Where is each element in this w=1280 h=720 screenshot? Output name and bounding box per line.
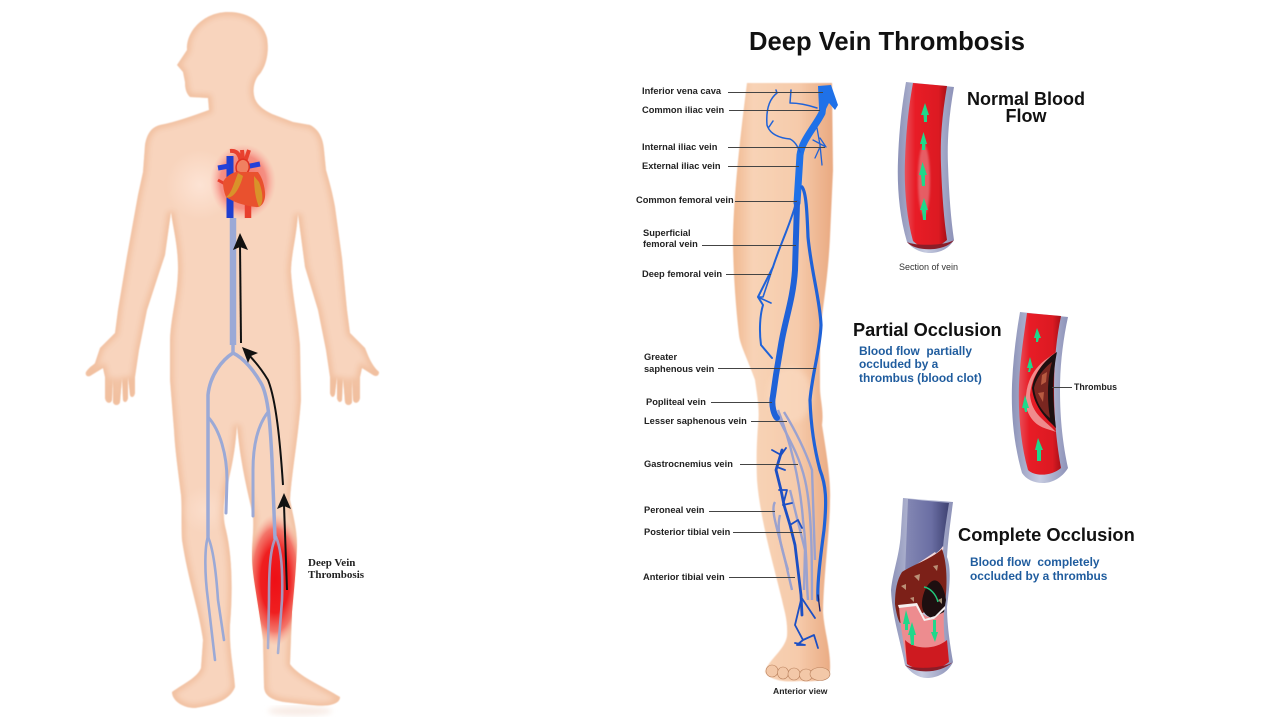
vein labels: Posterior tibial vein — [644, 527, 731, 537]
icon: heart — [210, 144, 276, 220]
panel: complete occlusion — [891, 498, 1135, 678]
vein labels: Common iliac vein — [642, 105, 724, 115]
thrombus callout — [1052, 382, 1117, 392]
vein labels: Peroneal vein — [644, 505, 705, 515]
vein labels: Superficial — [643, 228, 691, 238]
leg and torso veins — [205, 218, 282, 660]
toes — [766, 665, 830, 681]
label: Deep Vein Thrombosis — [308, 557, 365, 581]
panel: partial occlusion — [853, 312, 1117, 483]
thrombus callout: Thrombus — [1074, 382, 1117, 392]
description: occluded by a thrombus — [970, 569, 1108, 583]
vein section — [898, 82, 954, 253]
leader lines — [702, 92, 825, 578]
vein labels: Internal iliac vein — [642, 142, 718, 152]
heading line two: Flow — [1006, 106, 1047, 126]
vein labels: Common femoral vein — [636, 195, 734, 205]
vena cava arrow — [818, 85, 838, 115]
vein labels: Gastrocnemius vein — [644, 459, 733, 469]
panel: leg anatomy — [636, 83, 838, 696]
panel: normal blood flow vein — [898, 82, 1085, 272]
vein labels: Lesser saphenous vein — [644, 416, 747, 426]
panel: body diagram — [86, 12, 379, 716]
heading: Complete Occlusion — [958, 524, 1135, 545]
description: occluded by a — [859, 357, 939, 371]
title: Deep Vein Thrombosis — [749, 28, 1025, 56]
leg silhouette — [733, 83, 833, 681]
vein labels: Anterior view — [773, 686, 828, 696]
description: Blood flow partially — [859, 344, 972, 358]
vein labels: External iliac vein — [642, 161, 721, 171]
flow arrows — [919, 103, 929, 220]
heading: Partial Occlusion — [853, 320, 1002, 340]
flow arrows — [1022, 328, 1043, 461]
vein labels: Popliteal vein — [646, 397, 706, 407]
label: Deep Vein Thrombosis: Thrombosis — [308, 569, 365, 581]
description — [859, 344, 982, 385]
calf redness: thrombosis glow — [252, 516, 297, 644]
superficial blue veins — [758, 90, 826, 648]
vein labels: Anterior tibial vein — [643, 572, 725, 582]
vein section with clot — [1012, 312, 1068, 483]
description — [970, 555, 1108, 583]
heading: Normal Blood — [967, 89, 1085, 109]
vein section with clot — [891, 498, 953, 678]
arrows: path of the clot — [233, 233, 291, 590]
caption: Section of vein — [899, 262, 958, 272]
human body silhouette — [86, 12, 379, 708]
vein labels: femoral vein — [643, 239, 698, 249]
flow arrows — [903, 587, 938, 645]
vein labels — [636, 86, 828, 696]
vein labels: Inferior vena cava — [642, 86, 722, 96]
vein labels: Greater — [644, 352, 677, 362]
description: Blood flow completely — [970, 555, 1100, 569]
knee and thigh shading — [768, 367, 812, 423]
foot reflection — [268, 706, 332, 716]
vein labels: Deep femoral vein — [642, 269, 722, 279]
deep calf veins — [773, 410, 815, 600]
chest highlights — [166, 150, 234, 220]
vein labels: saphenous vein — [644, 364, 715, 374]
description: thrombus (blood clot) — [859, 371, 982, 385]
label: Deep Vein Thrombosis: Deep Vein — [308, 557, 355, 569]
